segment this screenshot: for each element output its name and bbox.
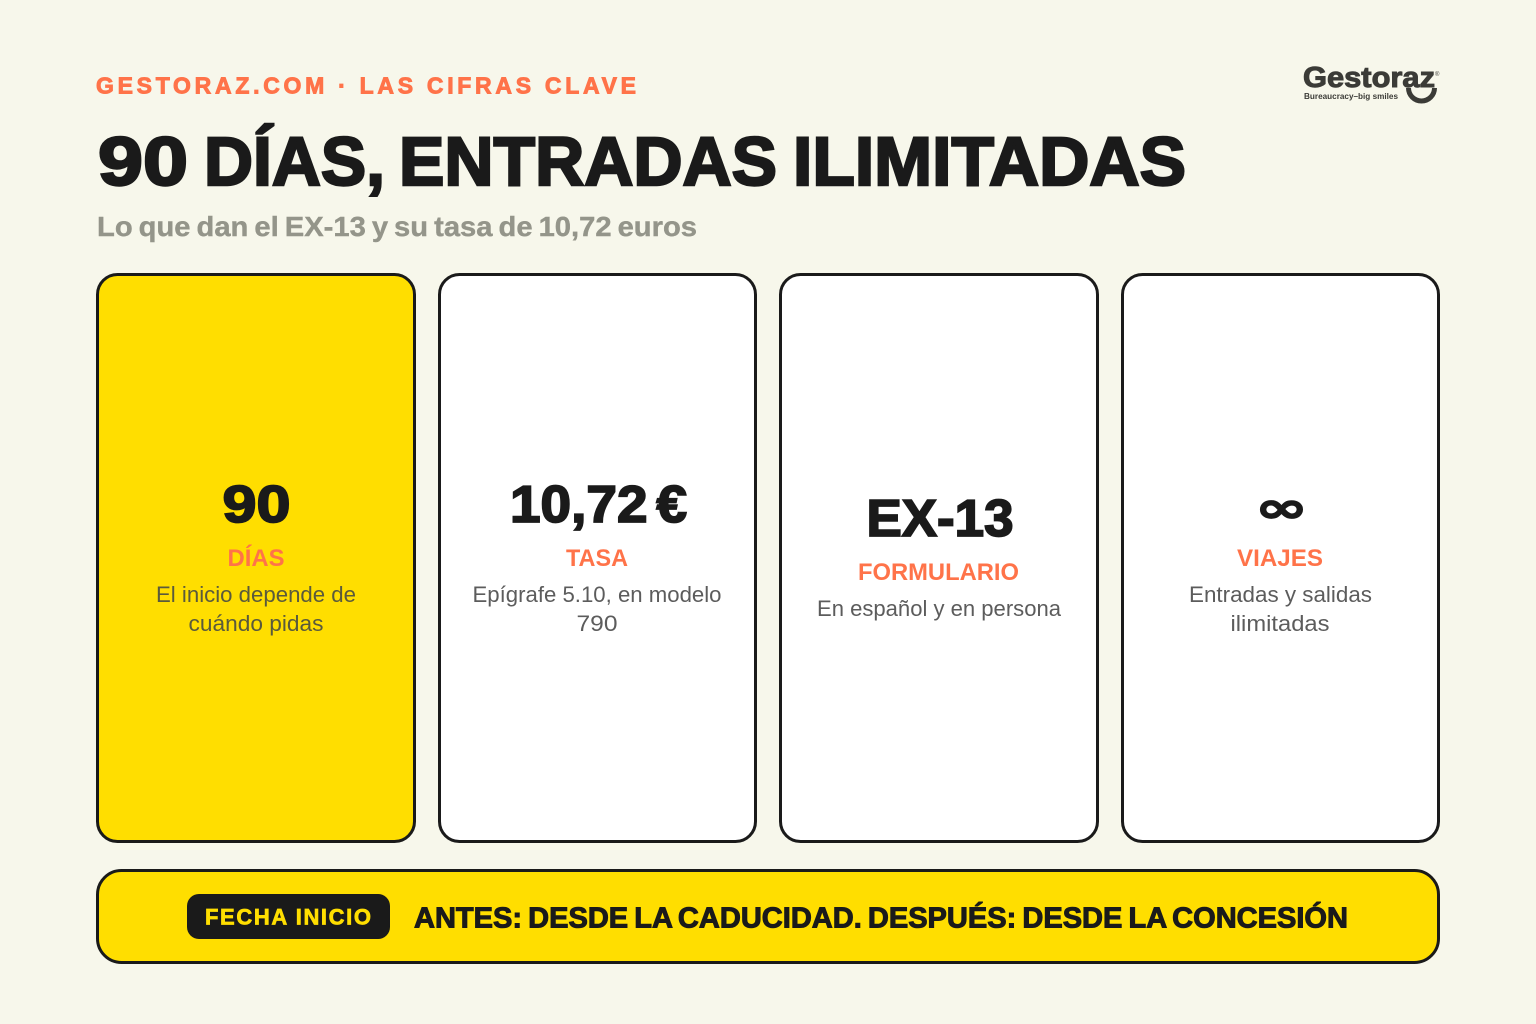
logo: Gestoraz: Gestoraz: [1303, 62, 1435, 94]
panel: días: El inicio depende de: [156, 582, 356, 607]
panel: formulario: EX-13: [866, 490, 1014, 548]
badge: fecha inicio: FECHA INICIO: [205, 904, 371, 930]
title: [98, 123, 1186, 200]
title: DÍAS,: [204, 123, 385, 200]
badge: fecha inicio: [187, 894, 390, 939]
icon: logo smile: [1408, 88, 1434, 101]
logo: Gestoraz: Bureaucracy–big smiles: [1304, 92, 1399, 101]
panel: tasa: 790: [576, 611, 618, 636]
panel: viajes: Entradas y salidas: [1189, 582, 1372, 607]
panel: días: 90: [222, 476, 290, 534]
panel: tasa: 10,72 €: [510, 476, 687, 534]
panel: días: cuándo pidas: [188, 611, 324, 636]
title: ILIMITADAS: [793, 123, 1186, 200]
panel: formulario: En español y en persona: [817, 596, 1062, 621]
panel: tasa: Epígrafe 5.10, en modelo: [472, 582, 722, 607]
logo: Gestoraz: ®: [1435, 71, 1440, 78]
callout banner: [98, 870, 1438, 962]
panel: tasa: [440, 274, 756, 842]
panel: viajes: [1122, 274, 1438, 842]
callout text: ANTES: DESDE LA CADUCIDAD. DESPUÉS: DESDE LA CONCESIÓN: [414, 900, 1348, 934]
panel: tasa: TASA: [566, 545, 628, 572]
title: ENTRADAS: [399, 123, 777, 200]
title: 90: [98, 123, 188, 200]
eyebrow heading: GESTORAZ.COM · LAS CIFRAS CLAVE: [96, 72, 636, 98]
panel: formulario: FORMULARIO: [858, 559, 1019, 586]
subtitle: Lo que dan el EX-13 y su tasa de 10,72 euros: [97, 211, 697, 242]
panel: días: [98, 274, 414, 842]
panel: días: DÍAS: [228, 544, 284, 572]
panel: viajes: ilimitadas: [1230, 611, 1330, 636]
panel: viajes: VIAJES: [1237, 545, 1323, 572]
panel: viajes: ∞: [1255, 483, 1308, 532]
panel: formulario: [780, 274, 1098, 842]
